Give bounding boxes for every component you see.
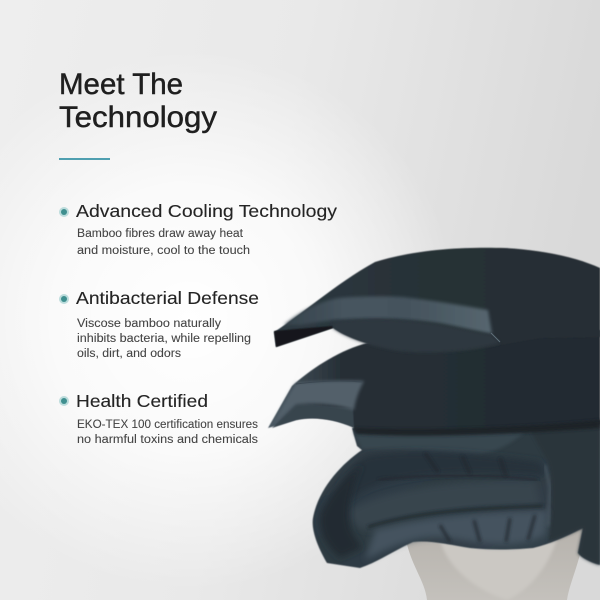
mannequin head [405, 522, 586, 600]
fold lower highlight [365, 510, 548, 560]
title: Meet The [59, 68, 183, 101]
icon: teal bullet [59, 396, 69, 406]
description: antibacterial: inhibits bacteria, while repelling [77, 333, 251, 345]
lower pillow flap [272, 381, 364, 426]
description: cooling [77, 228, 250, 257]
upper pillow [274, 248, 600, 352]
upper pillow flap [284, 296, 492, 334]
fold left shadow [320, 465, 362, 558]
title: Technology [59, 101, 217, 134]
title [59, 68, 217, 134]
heading: Antibacterial Defense: Antibacterial Defense [76, 288, 259, 308]
fold upper shadow [334, 452, 545, 520]
description: antibacterial: Viscose bamboo naturally [77, 318, 221, 330]
heading: Health Certified: Health Certified [76, 391, 208, 411]
lower pillow bottom shadow [354, 420, 600, 436]
product photo: stacked bedding on mannequin head [268, 248, 600, 600]
feature: Health Certified [59, 391, 258, 446]
icon: teal bullet [59, 207, 69, 217]
comforter top band [354, 431, 525, 454]
description: certification: no harmful toxins and chemicals [77, 434, 258, 446]
heading: Advanced Cooling Technology: Advanced Cooling Technology [76, 201, 337, 221]
feature: Antibacterial Defense [59, 288, 259, 360]
description: cooling: Bamboo fibres draw away heat [77, 228, 244, 240]
description: antibacterial [77, 318, 251, 360]
icon: teal bullet [59, 294, 69, 304]
upper pillow inner shadow [333, 320, 500, 352]
lower pillow [268, 330, 600, 436]
fold middle highlight [350, 481, 540, 530]
upper pillow tip [274, 326, 333, 347]
description: certification [77, 419, 258, 446]
comforter right body [530, 420, 600, 565]
description: antibacterial: oils, dirt, and odors [77, 348, 181, 360]
folded comforter [313, 420, 600, 568]
lower pillow under-flap [272, 404, 354, 428]
description: cooling: and moisture, cool to the touch [77, 245, 250, 257]
description: certification: EKO-TEX 100 certification ensures [77, 419, 258, 431]
accent divider [59, 158, 110, 160]
feature: Advanced Cooling Technology [59, 201, 337, 257]
fold creases [368, 506, 543, 527]
